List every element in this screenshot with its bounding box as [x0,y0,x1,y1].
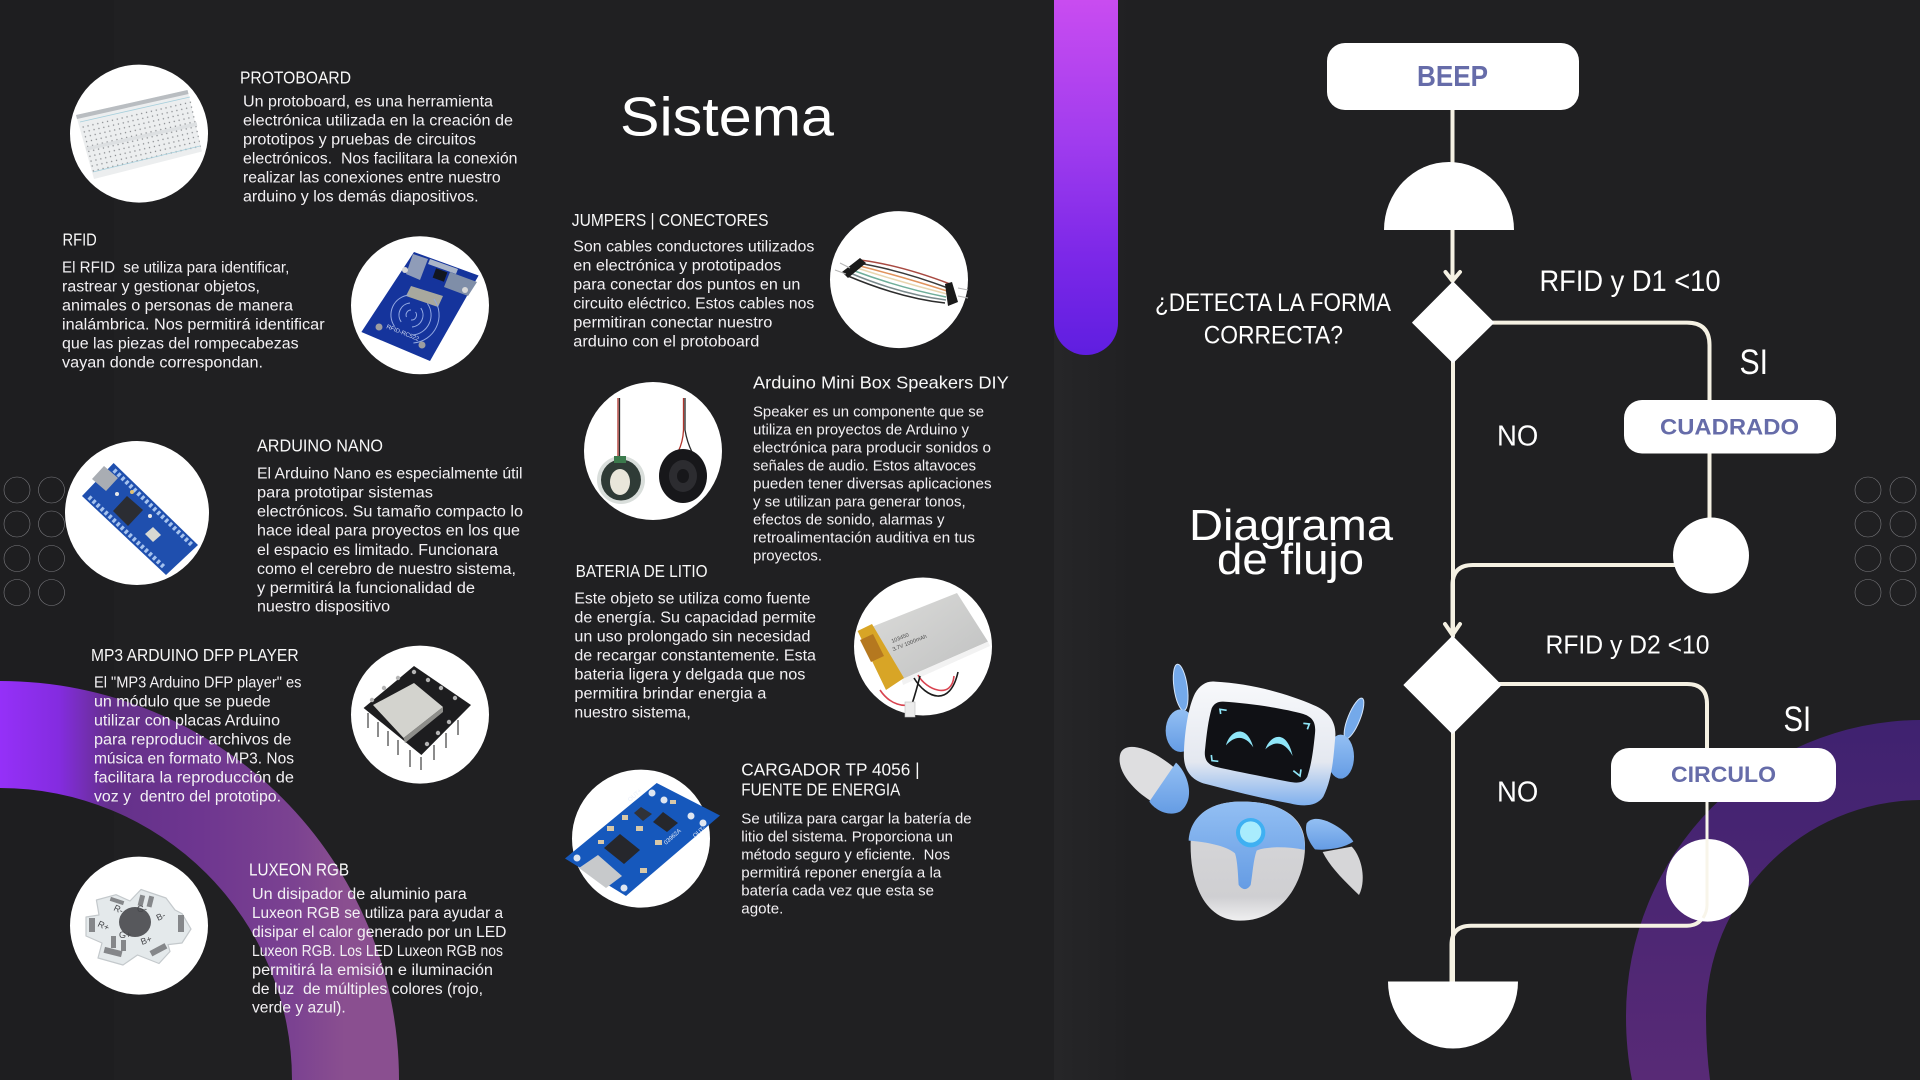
icon: lipo battery [854,578,992,717]
text: protoboard description: realizar las conexiones entre nuestro [243,170,501,187]
connector circle 2 [1666,839,1749,922]
text: rfid description: que las piezas del rompecabezas [62,336,299,353]
text: bateria description: un uso prolongado sin necesidad [574,629,810,646]
panel: luxeon rgb [70,857,506,1017]
text: rfid description [62,260,325,372]
text: bateria description [574,591,816,722]
icon: luxeon star heatsink [70,857,208,995]
dot circles left [4,477,64,606]
text: bateria description: bateria ligera y delgada que nos [574,667,806,684]
text: rfid description: rastrear y gestionar objetos, [62,279,260,296]
text: bateria description: nuestro sistema, [574,704,691,722]
text: luxeon description: permitirá la emisión e iluminación [252,962,493,979]
text: luxeon description: Un disipador de aluminio para [252,886,467,903]
decorative purple arc right [1626,720,1920,1080]
text: jumpers description: arduino con el protoboard [573,333,759,350]
text: arduino nano description: nuestro dispositivo [257,599,390,616]
text: bateria description: Este objeto se utiliza como fuente [574,591,810,608]
text: arduino nano description: y permitirá la funcionalidad de [257,580,475,597]
icon: luxeon star heatsink: G- [137,904,147,914]
text: mp3 description: para reproducir archivos de [94,731,291,748]
text: mp3 description: música en formato MP3. Nos [94,750,294,767]
node: circulo [1611,748,1836,802]
node: cuadrado [1624,400,1836,454]
text: protoboard description: Un protoboard, es una herramienta [243,94,493,111]
text: mp3 description: voz y dentro del prototipo. [94,788,281,806]
title: diagrama de flujo: Diagrama [1189,501,1394,550]
title: diagrama de flujo: de flujo [1217,535,1364,584]
question label: CORRECTA? [1204,322,1343,350]
text: luxeon description: Luxeon RGB se utiliza para ayudar a [252,905,503,922]
node: cuadrado: CUADRADO [1660,415,1799,440]
label: si 1: SI [1740,343,1768,382]
dot circles right [1855,477,1916,606]
text: arduino nano description: El Arduino Nano es especialmente útil [257,466,522,483]
text: cargador description: litio del sistema. Proporciona un [741,830,953,846]
text: speakers description: Speaker es un componente que se [753,405,984,421]
text: jumpers description [573,238,815,350]
text: mp3 description: un módulo que se puede [94,693,271,710]
start node: beep [1327,43,1579,110]
text: arduino nano description: electrónicos. Su tamaño compacto lo [257,504,523,521]
text: bateria description: de recargar constantemente. Esta [574,648,816,665]
text: mp3 description [94,674,302,806]
icon: lipo battery: 103450 [891,632,910,645]
decorative purple vertical bar [1054,0,1118,355]
text: jumpers description: para conectar dos puntos en un [573,276,800,293]
text: speakers description: y se utilizan para generar tonos, [753,495,966,511]
question label: ¿DETECTA LA FORMA [1155,289,1391,317]
icon: tp4056 charger board: 03962A [663,828,683,846]
text: protoboard description: prototipos y pruebas de circuitos [243,132,476,149]
heading: cargador [741,760,920,800]
text: jumpers description: circuito eléctrico. Estos cables nos [573,295,815,312]
icon: robot mascot [1120,663,1368,921]
icon: mini speakers [584,382,722,520]
text: speakers description: señales de audio. Estos altavoces [753,459,976,475]
start node: beep: BEEP [1417,61,1488,93]
panel: mp3 dfp player [91,645,489,806]
text: bateria description: de energía. Su capacidad permite [574,610,816,627]
text: speakers description: electrónica para producir sonidos o [753,441,991,457]
panel: rfid [62,230,489,374]
connector through circle 2 [1703,802,1707,918]
text: arduino nano description: hace ideal para proyectos en los que [257,523,520,540]
icon: luxeon star heatsink: R+ [96,919,111,933]
icon: tp4056 charger board: OUT+ [627,788,644,803]
text: arduino nano description: para prototipar sistemas [257,485,433,502]
text: speakers description: pueden tener diversas aplicaciones [753,477,992,493]
text: protoboard description: electrónicos. Nos facilitara la conexión [243,151,518,168]
icon: mp3 module [351,646,489,784]
text: rfid description: El RFID se utiliza para identificar, [62,260,289,277]
text: protoboard description: electrónica utilizada en la creación de [243,113,513,130]
text: arduino nano description [257,466,523,616]
text: mp3 description: El "MP3 Arduino DFP player" es [94,674,302,691]
label: si 2: SI [1784,700,1811,739]
text: cargador description [741,812,972,918]
label: rfid d1: RFID y D1 <10 [1540,265,1720,298]
text: arduino nano description: el espacio es limitado. Funcionara [257,542,498,559]
connector circle 1 [1673,518,1749,594]
icon: protoboard [70,65,208,203]
text: jumpers description: en electrónica y prototipados [573,257,782,274]
icon: tp4056 charger board: OUT- [692,825,707,839]
icon: luxeon star heatsink: B+ [139,934,153,947]
text: cargador description: agote. [741,902,783,918]
heading: luxeon rgb: LUXEON RGB [249,860,349,880]
heading: rfid: RFID [62,230,97,250]
decision diamond 1 [1413,282,1494,363]
delay node: top half circle [1384,162,1514,230]
icon: lipo battery: 3.7V 1000mAh [892,634,928,653]
text: rfid description: animales o personas de manera [62,298,293,315]
panel: protoboard [70,65,518,206]
text: protoboard description: arduino y los demás diapositivos. [243,189,479,206]
flowchart [1155,43,1836,1048]
heading: protoboard: PROTOBOARD [240,67,351,87]
text: speakers description: proyectos. [753,549,822,565]
heading: jumpers: JUMPERS | CONECTORES [572,210,768,230]
text: arduino nano description: como el cerebro de nuestro sistema, [257,561,516,578]
text: luxeon description: disipar el calor generado por un LED [252,924,506,941]
connector lines [1445,108,1710,982]
text: speakers description: retroalimentación auditiva en tus [753,531,975,547]
text: mp3 description: utilizar con placas Arduino [94,712,280,729]
panel: speakers [584,372,1009,565]
text: cargador description: permitirá reponer energía a la [741,866,942,882]
panel: arduino nano [65,435,523,616]
heading: mp3 dfp player: MP3 ARDUINO DFP PLAYER [91,645,299,665]
text: speakers description: utiliza en proyectos de Arduino y [753,423,970,439]
heading: cargador: CARGADOR TP 4056 | [741,760,920,780]
icon: rfid module: RFID-RC522 [385,324,420,343]
text: speakers description: efectos de sonido, alarmas y [753,513,945,529]
end node: bottom half circle [1388,982,1518,1048]
text: luxeon description [252,886,506,1017]
decision diamond 2 [1404,636,1501,734]
text: rfid description: inalámbrica. Nos permitirá identificar [62,317,325,334]
icon: luxeon star heatsink: R- [112,903,125,916]
icon: jumper wires [830,211,968,348]
heading: bateria: BATERIA DE LITIO [576,561,708,581]
text: jumpers description: Son cables conductores utilizados [573,238,815,255]
text: jumpers description: permitiran conectar nuestro [573,314,772,331]
icon: tp4056 charger board [565,770,720,908]
panel: bateria [574,561,992,722]
icon: luxeon star heatsink: B- [155,910,167,923]
text: luxeon description: de luz de múltiples colores (rojo, [252,981,483,998]
node: circulo: CIRCULO [1671,762,1776,787]
heading: arduino nano: ARDUINO NANO [257,435,383,455]
title: sistema: Sistema [620,85,834,147]
text: speakers description [753,405,992,565]
text: luxeon description: verde y azul). [252,1000,346,1017]
label: rfid d2: RFID y D2 <10 [1546,630,1710,660]
text: mp3 description: facilitara la reproducción de [94,769,294,786]
text: bateria description: permitira brindar energia a [574,686,767,703]
panel: jumpers [572,210,968,350]
decorative purple arc left [0,681,399,1080]
label: no 1: NO [1497,420,1538,452]
text: cargador description: Se utiliza para cargar la batería de [741,812,972,828]
text: protoboard description [243,94,518,206]
label: no 2: NO [1497,777,1538,809]
text: luxeon description: Luxeon RGB. Los LED Luxeon RGB nos [252,943,503,960]
text: cargador description: método seguro y eficiente. Nos [741,848,950,864]
icon: rfid module [351,236,489,374]
heading: speakers: Arduino Mini Box Speakers DIY [753,372,1009,392]
text: rfid description: vayan donde correspondan. [62,355,263,372]
heading: cargador: FUENTE DE ENERGIA [741,780,901,800]
icon: arduino nano board [65,441,209,585]
question label [1155,289,1391,350]
text: cargador description: batería cada vez que esta se [741,884,934,900]
icon: luxeon star heatsink: G+ [119,930,131,940]
panel: cargador [565,760,972,918]
title: diagrama de flujo [1189,501,1394,584]
